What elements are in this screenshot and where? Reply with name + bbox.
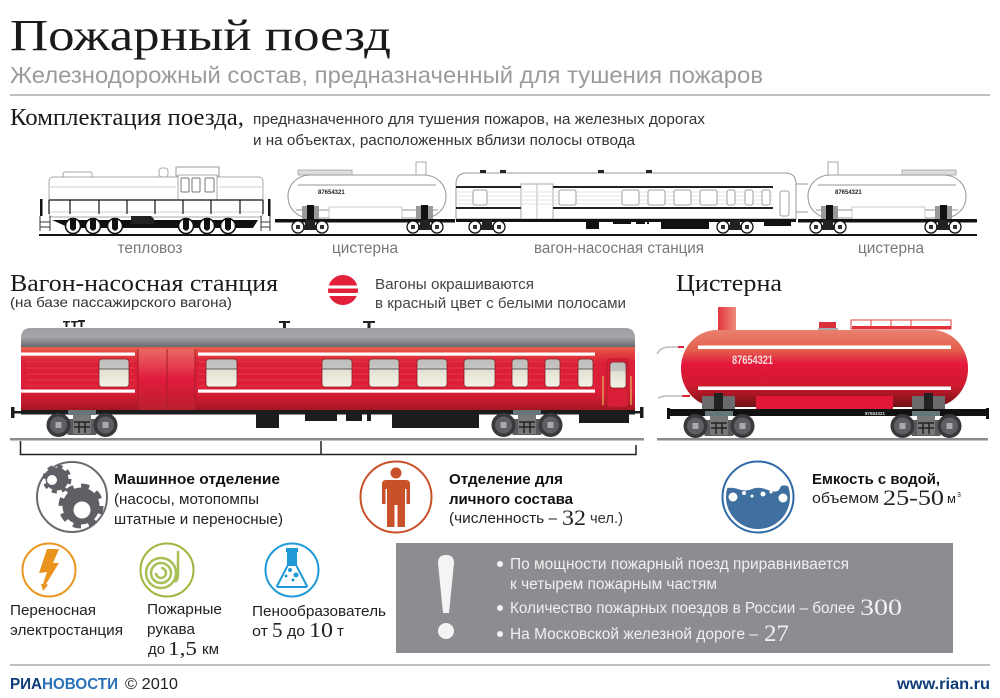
bogies [46,410,118,437]
icon: foam flask [266,544,318,596]
schematic labels [118,240,924,257]
generator label: электростанция [10,622,123,639]
tank wagon 1 [275,162,455,233]
crew section text [449,471,623,530]
hose label [147,601,222,660]
water capacity text: 25-50 [883,485,944,510]
valve [818,322,838,334]
icon: gears [37,462,107,532]
composition description: предназначенного для тушения пожаров, на железных дорогах [253,111,706,128]
fact text: Количество пожарных поездов в России – более [510,600,855,617]
car body [21,347,635,410]
crew section text: (численность – [449,510,558,527]
engine room text: Машинное отделение [114,471,280,488]
tank wagon 2 [796,162,977,233]
water capacity text: Емкость с водой, [812,471,940,488]
hose label: до [148,641,165,658]
bogies [684,411,754,438]
foam label [252,603,386,642]
schematic train [39,162,977,236]
white stripes [698,346,951,390]
copyright: © 2010 [125,676,178,693]
frame: 87654321 [865,411,886,416]
icon: red livery [328,275,358,305]
tank wagon 1: 87654321 [318,190,345,196]
crew section text: личного состава [449,491,574,508]
generator label [10,602,123,639]
red tank wagon [657,307,989,440]
foam label: от [252,623,268,640]
roof equipment [63,320,375,328]
end door [603,359,631,407]
underframe [11,407,644,428]
foam label: т [337,623,344,640]
icon: person [360,462,432,532]
hose label: 1,5 [168,638,197,660]
heading: pump car: Вагон-насосная станция [10,271,278,297]
icon: fire hose [140,544,194,596]
engine room text: (насосы, мотопомпы [114,491,259,508]
icon: exclamation mark [438,555,454,639]
supports [702,393,945,410]
crew section text: Отделение для [449,471,563,488]
red pump car [10,320,644,440]
livery note [375,276,626,312]
roof [21,328,635,348]
crew section text: 32 [562,505,586,530]
fact text: 27 [764,621,789,646]
footer logo: РИАНОВОСТИ [10,676,118,693]
water capacity text: м [947,491,956,506]
schematic labels: цистерна [858,240,924,257]
schematic labels: вагон-насосная станция [534,240,704,257]
icon: water tank [722,462,796,532]
pump car schematic [456,170,796,233]
foam label: 5 [272,618,282,642]
panel: facts [396,543,953,653]
dome [718,307,736,331]
schematic labels: тепловоз [118,240,182,257]
composition description: и на объектах, расположенных вблизи полосы отвода [253,132,636,149]
section bracket [20,441,636,454]
hose label: км [202,641,219,658]
tank wagon 2: 87654321 [835,190,862,196]
engine room text: штатные и переносные) [114,511,283,528]
frame [667,408,989,419]
fact text: По мощности пожарный поезд приравнивается [510,556,849,573]
composition description [253,111,706,149]
white stripes [21,352,595,393]
fact text: к четырем пожарным частям [510,576,717,593]
fact text: На Московской железной дороге – [510,626,758,643]
water capacity text: 3 [957,492,961,499]
foam label: до [287,623,305,640]
generator label: Переносная [10,602,96,619]
hoses [657,347,686,398]
icon: generator [22,544,76,596]
fact text [510,556,902,646]
platform [851,320,951,329]
livery note: в красный цвет с белыми полосами [375,295,626,312]
heading: tank: Цистерна [676,271,782,297]
website: www.rian.ru [896,676,990,693]
tank body [681,330,968,407]
side box [756,396,893,409]
tank number: 87654321 [732,353,773,367]
foam label: 10 [309,618,333,642]
windows [99,359,593,387]
pump car note: (на базе пассажирского вагона) [10,294,232,310]
livery note: Вагоны окрашиваются [375,276,534,293]
heading: train composition: Комплектация поезда, [10,105,244,131]
water capacity text [812,471,961,510]
doors [138,349,195,410]
water capacity text: объемом [812,490,879,507]
subtitle: Железнодорожный состав, предназначенный для тушения пожаров [10,62,763,88]
locomotive [40,167,270,234]
hose label: Пожарные [147,601,222,618]
engine room text [114,471,283,528]
foam label: Пенообразователь [252,603,386,620]
hose label: рукава [147,621,196,638]
crew section text: чел.) [590,510,623,527]
title: Пожарный поезд [10,11,391,60]
fact bullets [497,561,503,637]
fact text: 300 [860,595,902,620]
schematic labels: цистерна [332,240,398,257]
